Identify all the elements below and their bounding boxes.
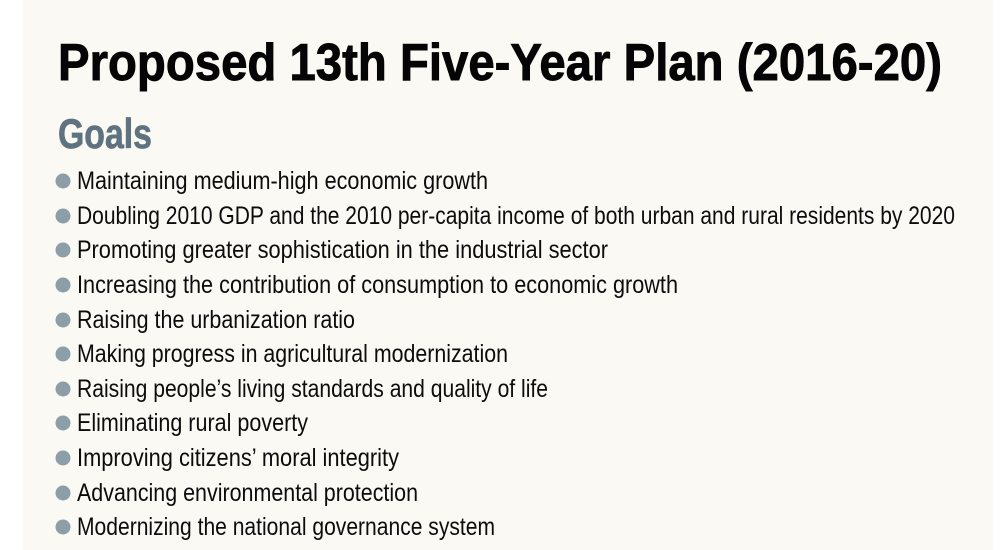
goals list [56, 167, 955, 541]
goal 7: Raising people’s living standards and quality of life [77, 375, 548, 403]
heading: goals: Goals [58, 110, 152, 157]
goal 3: Promoting greater sophistication in the industrial sector [77, 236, 608, 264]
goal 4: Increasing the contribution of consumption to economic growth [77, 271, 678, 299]
goal 8: Eliminating rural poverty [77, 409, 308, 437]
goal 1: Maintaining medium-high economic growth [77, 167, 488, 195]
goal 5: Raising the urbanization ratio [77, 306, 355, 334]
goal 6: Making progress in agricultural modernization [77, 340, 508, 368]
goal 11: Modernizing the national governance system [77, 513, 495, 541]
title: Proposed 13th Five-Year Plan (2016-20) [58, 34, 942, 92]
goal 10: Advancing environmental protection [77, 479, 418, 507]
goal 9: Improving citizens’ moral integrity [77, 444, 399, 472]
